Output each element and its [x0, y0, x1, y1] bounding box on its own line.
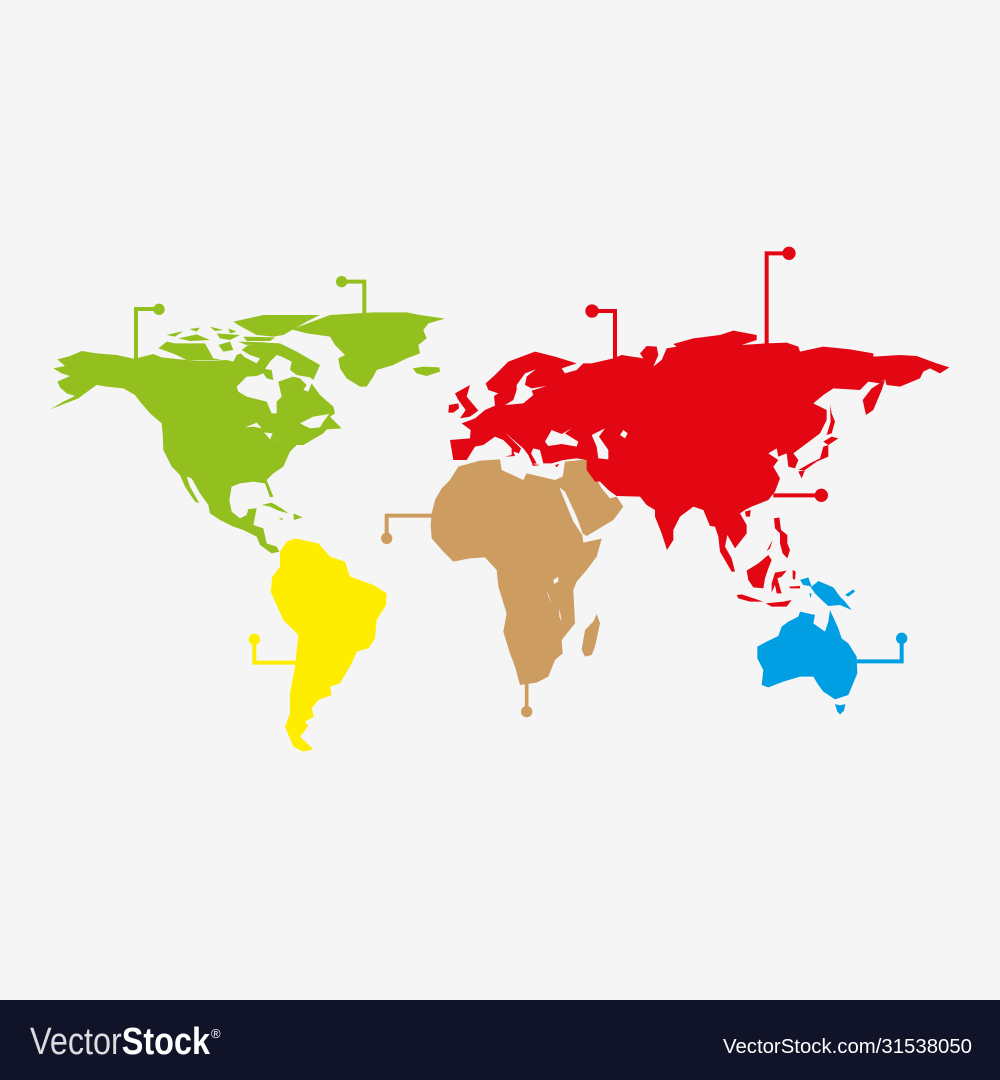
- footer image id: VectorStock.com/31538050: [723, 1036, 972, 1058]
- island: Madagascar: [582, 614, 600, 657]
- continent: Australia and Oceania: [757, 577, 857, 714]
- islands: Canadian Arctic: [158, 315, 320, 360]
- islands: Mediterranean and Hainan: [532, 464, 751, 517]
- continent: Africa and Arabia: [431, 459, 623, 685]
- world map: [50, 247, 949, 752]
- callout marker: Siberia: [767, 247, 796, 345]
- islands: New Guinea: [800, 577, 855, 610]
- callout marker: Europe: [585, 304, 615, 360]
- callout marker: East Asia: [773, 489, 828, 502]
- islands: Southeast Asia: [737, 517, 800, 607]
- island: Tasmania: [835, 704, 845, 714]
- footer bar: [0, 1000, 1000, 1080]
- island: Iceland: [413, 367, 440, 376]
- island: Greenland: [292, 312, 445, 387]
- callout marker: South Africa: [521, 683, 532, 717]
- continent: North America with Greenland: [50, 312, 445, 553]
- registered mark: ®: [211, 1026, 221, 1041]
- continent: Eurasia: [448, 331, 949, 572]
- callout marker: Alaska: [136, 304, 165, 359]
- islands: Kamchatka, Sakhalin and Japan: [798, 380, 885, 478]
- islands: Caribbean: [262, 503, 303, 520]
- callout marker: Greenland: [336, 276, 364, 315]
- islands: Britain and Ireland: [448, 385, 478, 418]
- continent: South America: [271, 538, 387, 752]
- callout marker: Australia: [857, 633, 907, 661]
- callout marker: South America: [249, 634, 298, 663]
- footer logo: VectorStock: [30, 1021, 211, 1063]
- callout marker: West Africa: [381, 516, 433, 544]
